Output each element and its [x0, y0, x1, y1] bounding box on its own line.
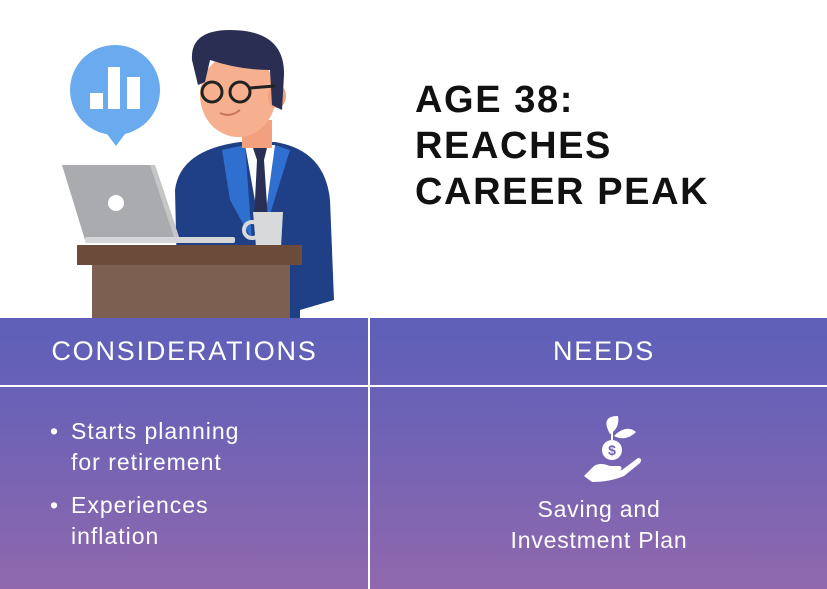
- heading: needs: NEEDS: [553, 336, 655, 366]
- text: considerations list: for retirement: [71, 449, 222, 475]
- cup: [244, 212, 283, 247]
- text: considerations list: Starts planning: [71, 418, 239, 444]
- panel: table: [0, 318, 827, 589]
- title: CAREER PEAK: [415, 171, 709, 213]
- text: considerations list: inflation: [71, 523, 159, 549]
- heading: considerations: CONSIDERATIONS: [51, 336, 318, 366]
- title: [415, 79, 709, 213]
- text: saving and investment plan: [511, 496, 687, 553]
- text: saving and investment plan: Investment Plan: [511, 527, 687, 553]
- icon: chart speech bubble: [70, 45, 160, 146]
- title: AGE 38:: [415, 79, 574, 121]
- laptop: [62, 165, 235, 243]
- text: considerations list: •: [50, 492, 59, 518]
- man: [175, 30, 334, 318]
- text: considerations list: [50, 418, 239, 549]
- text: considerations list: •: [50, 418, 59, 444]
- illustration: man at desk: [62, 30, 334, 318]
- desk: [77, 245, 302, 320]
- text: considerations list: Experiences: [71, 492, 209, 518]
- icon: plant coin hand: $: [608, 442, 616, 458]
- title: REACHES: [415, 125, 612, 167]
- icon: plant coin hand: [584, 416, 642, 482]
- text: saving and investment plan: Saving and: [537, 496, 661, 522]
